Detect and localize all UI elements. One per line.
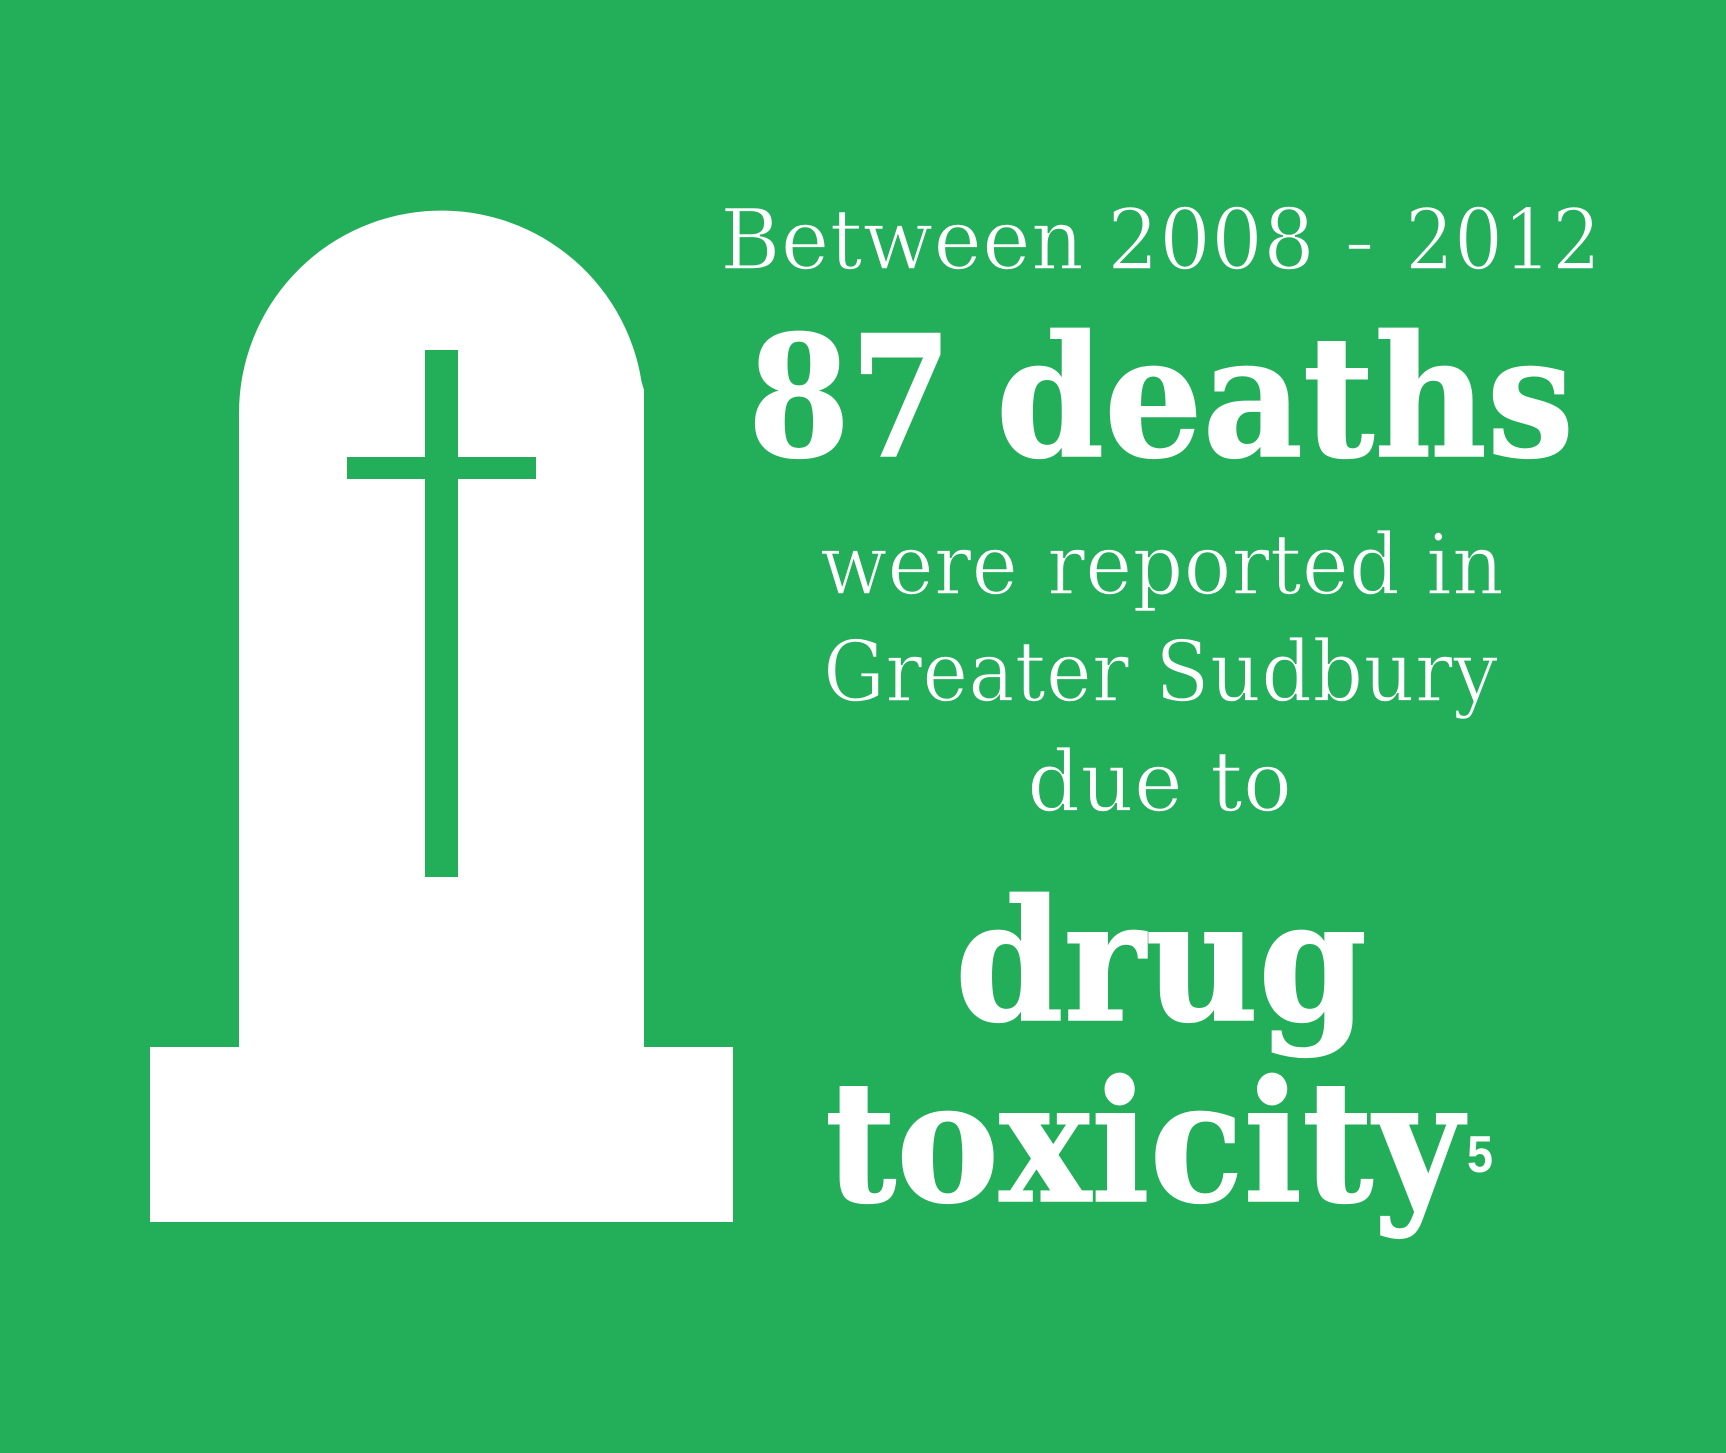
heading: toxicity: toxicity (825, 1043, 1467, 1241)
text: Greater Sudbury: Sudbury (1155, 623, 1499, 721)
text: were reported in: were (820, 516, 1018, 614)
text: date range: – (1346, 191, 1373, 289)
text: due to (1027, 733, 1292, 831)
heading: 87 deaths: 87 (748, 298, 952, 496)
text: date range (720, 191, 1601, 289)
text: Greater Sudbury: Greater (823, 623, 1130, 721)
icon: tombstone with cross (150, 211, 733, 1222)
footnote marker: 5: 5 (1467, 1126, 1493, 1184)
heading: drug: drug (955, 862, 1367, 1060)
text: date range: Between (720, 191, 1084, 289)
text: Greater Sudbury (823, 623, 1499, 721)
text: due to: to (1210, 733, 1292, 831)
text: date range: 2012 (1405, 191, 1601, 289)
text: were reported in (820, 516, 1504, 614)
text: were reported in: reported (1047, 516, 1400, 614)
heading: 87 deaths: deaths (996, 298, 1574, 496)
heading: 87 deaths (748, 298, 1574, 496)
text: were reported in: in (1426, 516, 1504, 614)
text: date range: 2008 (1107, 191, 1315, 289)
text: due to: due (1027, 733, 1183, 831)
